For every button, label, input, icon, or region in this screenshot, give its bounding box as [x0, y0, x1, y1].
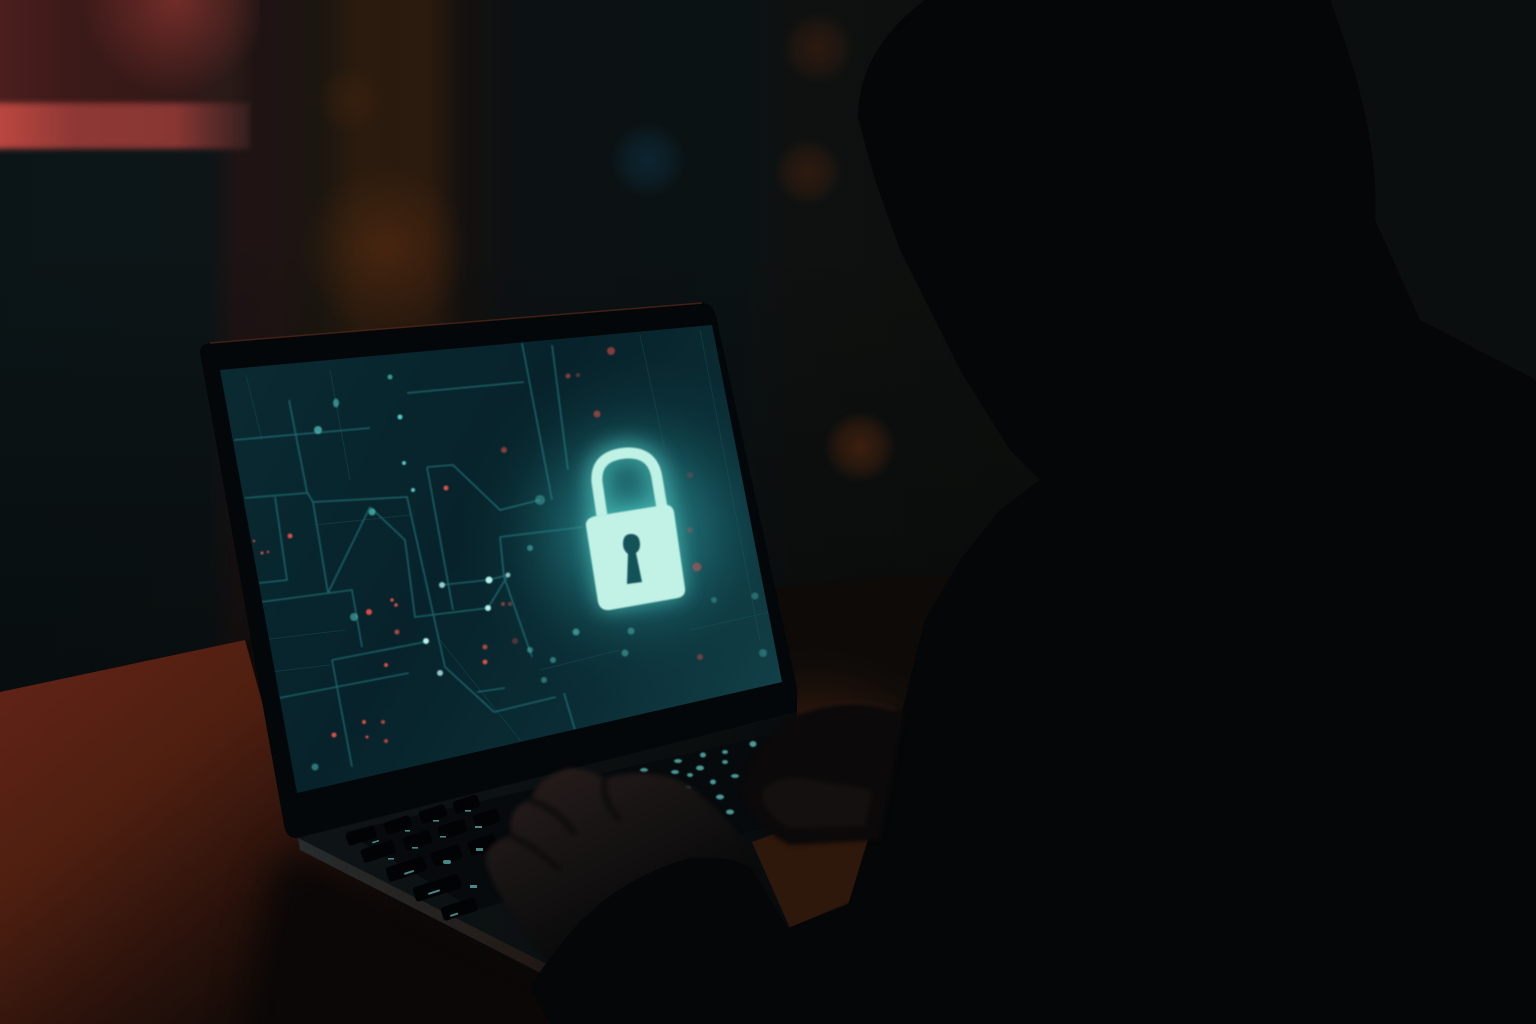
keyboard right section	[640, 741, 832, 814]
data nodes	[312, 374, 767, 770]
bright nodes	[423, 572, 510, 676]
hooded figure silhouette	[828, 0, 1536, 1024]
far hand	[741, 703, 905, 845]
circuit lines	[234, 343, 583, 767]
padlock glow	[586, 452, 685, 610]
red data points	[253, 347, 703, 743]
screen	[220, 325, 782, 793]
keyhole	[623, 534, 642, 584]
laptop	[200, 303, 870, 990]
faint grid	[246, 330, 770, 740]
keyboard key labels	[372, 810, 521, 917]
hands on keyboard	[486, 703, 905, 1024]
sleeve cuff	[530, 858, 850, 1024]
padlock icon	[586, 452, 685, 610]
red wall light	[0, 0, 260, 149]
near hand	[486, 768, 782, 985]
laptop base and keyboard deck	[298, 712, 870, 990]
padlock shackle	[597, 453, 662, 516]
table	[0, 575, 1536, 1024]
scene illustration	[0, 0, 907, 1024]
padlock body	[586, 505, 685, 610]
bokeh lights	[316, 12, 896, 483]
laptop lid	[200, 303, 797, 838]
keyboard keys	[345, 794, 501, 921]
